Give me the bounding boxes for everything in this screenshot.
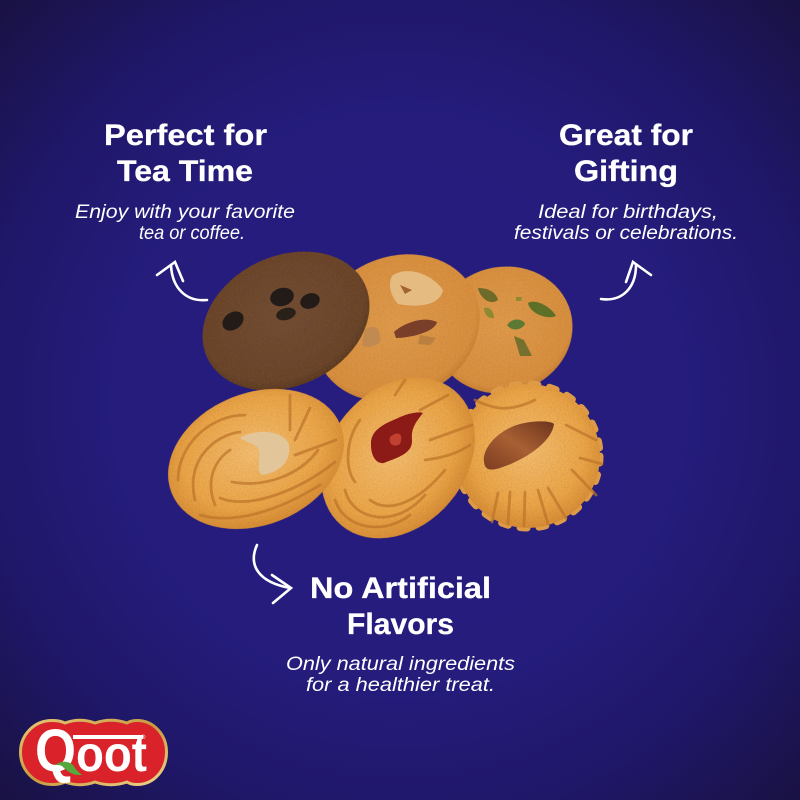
- cookie: almond: [456, 384, 602, 528]
- heading: perfect for tea time: Perfect for: [104, 119, 267, 152]
- heading: great for gifting: Great for: [559, 119, 693, 152]
- heading: great for gifting: [559, 119, 693, 188]
- text block: tea time: [75, 119, 295, 244]
- heading: no artificial flavors: No Artificial: [310, 572, 491, 605]
- arrow: to no artificial flavors: [254, 545, 291, 603]
- description: gifting: [514, 201, 738, 244]
- logo leaf: [55, 762, 82, 775]
- logo badge: [20, 720, 166, 785]
- description: no artificial flavors: [286, 653, 515, 696]
- cookie: nut: [290, 228, 504, 428]
- cookie: chocolate chip: [180, 225, 392, 417]
- text block: gifting: [514, 119, 738, 244]
- description: tea time: [75, 201, 295, 244]
- cookie: pistachio: [419, 251, 587, 409]
- logo wordmark: oot: [76, 726, 147, 782]
- heading: perfect for tea time: Tea Time: [117, 155, 253, 188]
- cookie: cashew: [147, 364, 365, 554]
- description: gifting: festivals or celebrations.: [514, 222, 738, 244]
- arrow: to tea time: [157, 262, 207, 300]
- arrow: to gifting: [601, 262, 651, 299]
- logo wordmark: ®: [141, 734, 146, 741]
- heading: perfect for tea time: [104, 119, 267, 188]
- description: no artificial flavors: for a healthier treat.: [306, 674, 495, 696]
- heading: great for gifting: Gifting: [574, 155, 678, 188]
- text block: no artificial flavors: [286, 572, 515, 696]
- description: gifting: Ideal for birthdays,: [538, 201, 718, 223]
- heading: no artificial flavors: [310, 572, 491, 641]
- logo wordmark: [35, 717, 147, 784]
- description: no artificial flavors: Only natural ingredients: [286, 653, 515, 675]
- description: tea time: Enjoy with your favorite: [75, 201, 295, 223]
- description: tea time: tea or coffee.: [139, 222, 245, 244]
- cookie: jam: [289, 347, 507, 569]
- cookie assortment: [147, 225, 602, 569]
- logo: Qoot: [20, 717, 166, 785]
- heading: no artificial flavors: Flavors: [347, 608, 454, 641]
- logo wordmark: Q: [35, 717, 76, 784]
